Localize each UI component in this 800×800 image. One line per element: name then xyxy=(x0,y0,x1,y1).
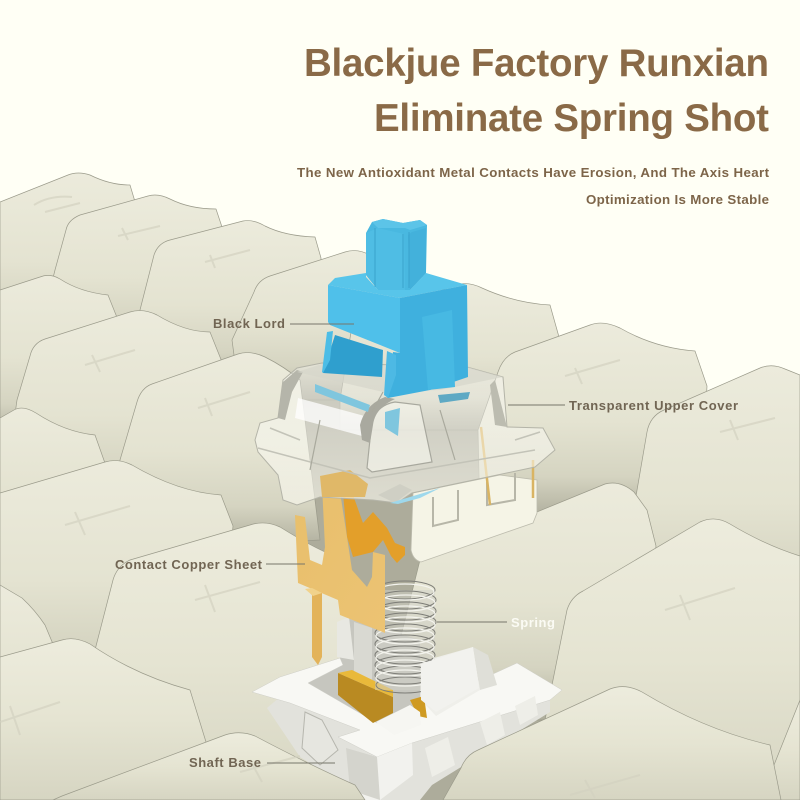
base front block xyxy=(350,743,413,800)
base front lobes xyxy=(425,696,538,777)
cover flange lines xyxy=(258,428,540,478)
inner well xyxy=(308,618,420,723)
cover body xyxy=(255,363,555,505)
stem left leg xyxy=(322,331,333,373)
cover visible gold xyxy=(320,470,368,497)
cover top frame xyxy=(297,364,503,392)
title xyxy=(304,42,769,140)
stem cross xyxy=(366,219,427,290)
cover lower panel xyxy=(411,475,537,562)
gold terminal block xyxy=(338,673,393,723)
base skirt xyxy=(267,680,550,800)
keycaps front row xyxy=(53,687,781,800)
stem front leg xyxy=(384,351,396,398)
cover cyan glints xyxy=(315,384,400,436)
shaft base right wall xyxy=(420,647,480,716)
cover window xyxy=(367,402,432,472)
subtitle: The New Antioxidant Metal Contacts Have Erosion, And The Axis Heart xyxy=(297,165,770,180)
contact copper sheet xyxy=(295,485,405,665)
subtitle xyxy=(297,165,770,207)
callout: Black Lord: Black Lord xyxy=(213,316,285,331)
stem housing right face xyxy=(388,285,468,398)
subtitle: Optimization Is More Stable xyxy=(586,192,769,207)
base front wall over spring xyxy=(376,647,479,735)
keycap field (back rows) xyxy=(0,173,800,800)
spring xyxy=(375,581,436,693)
base top rim xyxy=(252,658,562,757)
stem housing left face xyxy=(328,285,400,353)
switch: shaft base xyxy=(252,617,562,800)
callout: Contact Copper Sheet: Contact Copper Sheet xyxy=(115,557,263,572)
stem underside xyxy=(323,335,383,377)
transparent upper cover xyxy=(255,363,555,562)
callout: Transparent Upper Cover: Transparent Upper Cover xyxy=(569,398,738,413)
callout: Shaft Base: Shaft Base xyxy=(189,755,261,770)
icon: diamond notch on base xyxy=(302,712,338,765)
title: Blackjue Factory Runxian xyxy=(304,42,769,85)
stem side rail xyxy=(422,310,455,390)
stem housing top xyxy=(328,273,467,298)
blue stem: Black Lord xyxy=(322,219,468,398)
keyboard shadow base xyxy=(0,230,800,800)
title: Eliminate Spring Shot xyxy=(374,97,769,140)
callout: Spring: Spring xyxy=(511,615,555,630)
callout: Spring xyxy=(437,615,555,630)
